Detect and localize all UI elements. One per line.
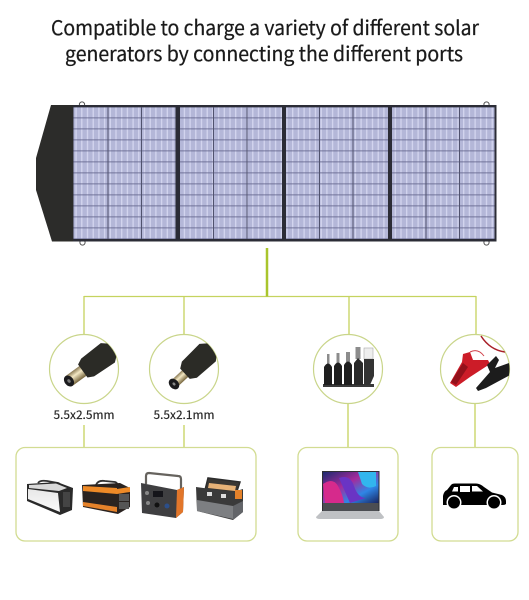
laptop icon xyxy=(316,471,384,519)
connector lines xyxy=(84,248,476,447)
title: Compatible to charge a variety of different solar xyxy=(51,12,479,41)
panel section 4 xyxy=(392,107,494,239)
clip wires xyxy=(481,336,505,352)
black clip xyxy=(476,356,512,391)
title: generators by connecting the different ports xyxy=(65,38,463,67)
label: 5.5x2.1mm xyxy=(154,407,214,423)
adapter base xyxy=(323,384,374,387)
connector: 5.5x2.5mm xyxy=(48,334,120,420)
connector: adapter tips xyxy=(314,334,382,404)
red clip xyxy=(450,352,490,387)
car icon xyxy=(443,484,506,510)
device box: car xyxy=(432,448,518,541)
adapter pins xyxy=(327,347,360,364)
panel section 1 xyxy=(74,107,176,239)
panel hanging loops xyxy=(79,102,489,245)
panel section 3 xyxy=(286,107,388,239)
grey orange power station xyxy=(196,478,243,520)
solar panel xyxy=(36,102,496,245)
cell dividers xyxy=(108,107,460,239)
orange generator xyxy=(82,481,130,514)
junction flap xyxy=(36,105,73,242)
adapter bodies xyxy=(324,358,374,385)
label: 5.5x2.5mm xyxy=(54,407,114,423)
connector: 5.5x2.1mm xyxy=(148,334,220,420)
silver generator xyxy=(27,481,73,515)
grey power station xyxy=(141,473,184,518)
title xyxy=(51,12,479,67)
panel section 2 xyxy=(180,107,282,239)
panel frame xyxy=(72,105,496,242)
device box: laptop xyxy=(298,448,398,541)
device box: solar generators xyxy=(16,448,256,541)
connector: battery clips xyxy=(440,334,512,404)
